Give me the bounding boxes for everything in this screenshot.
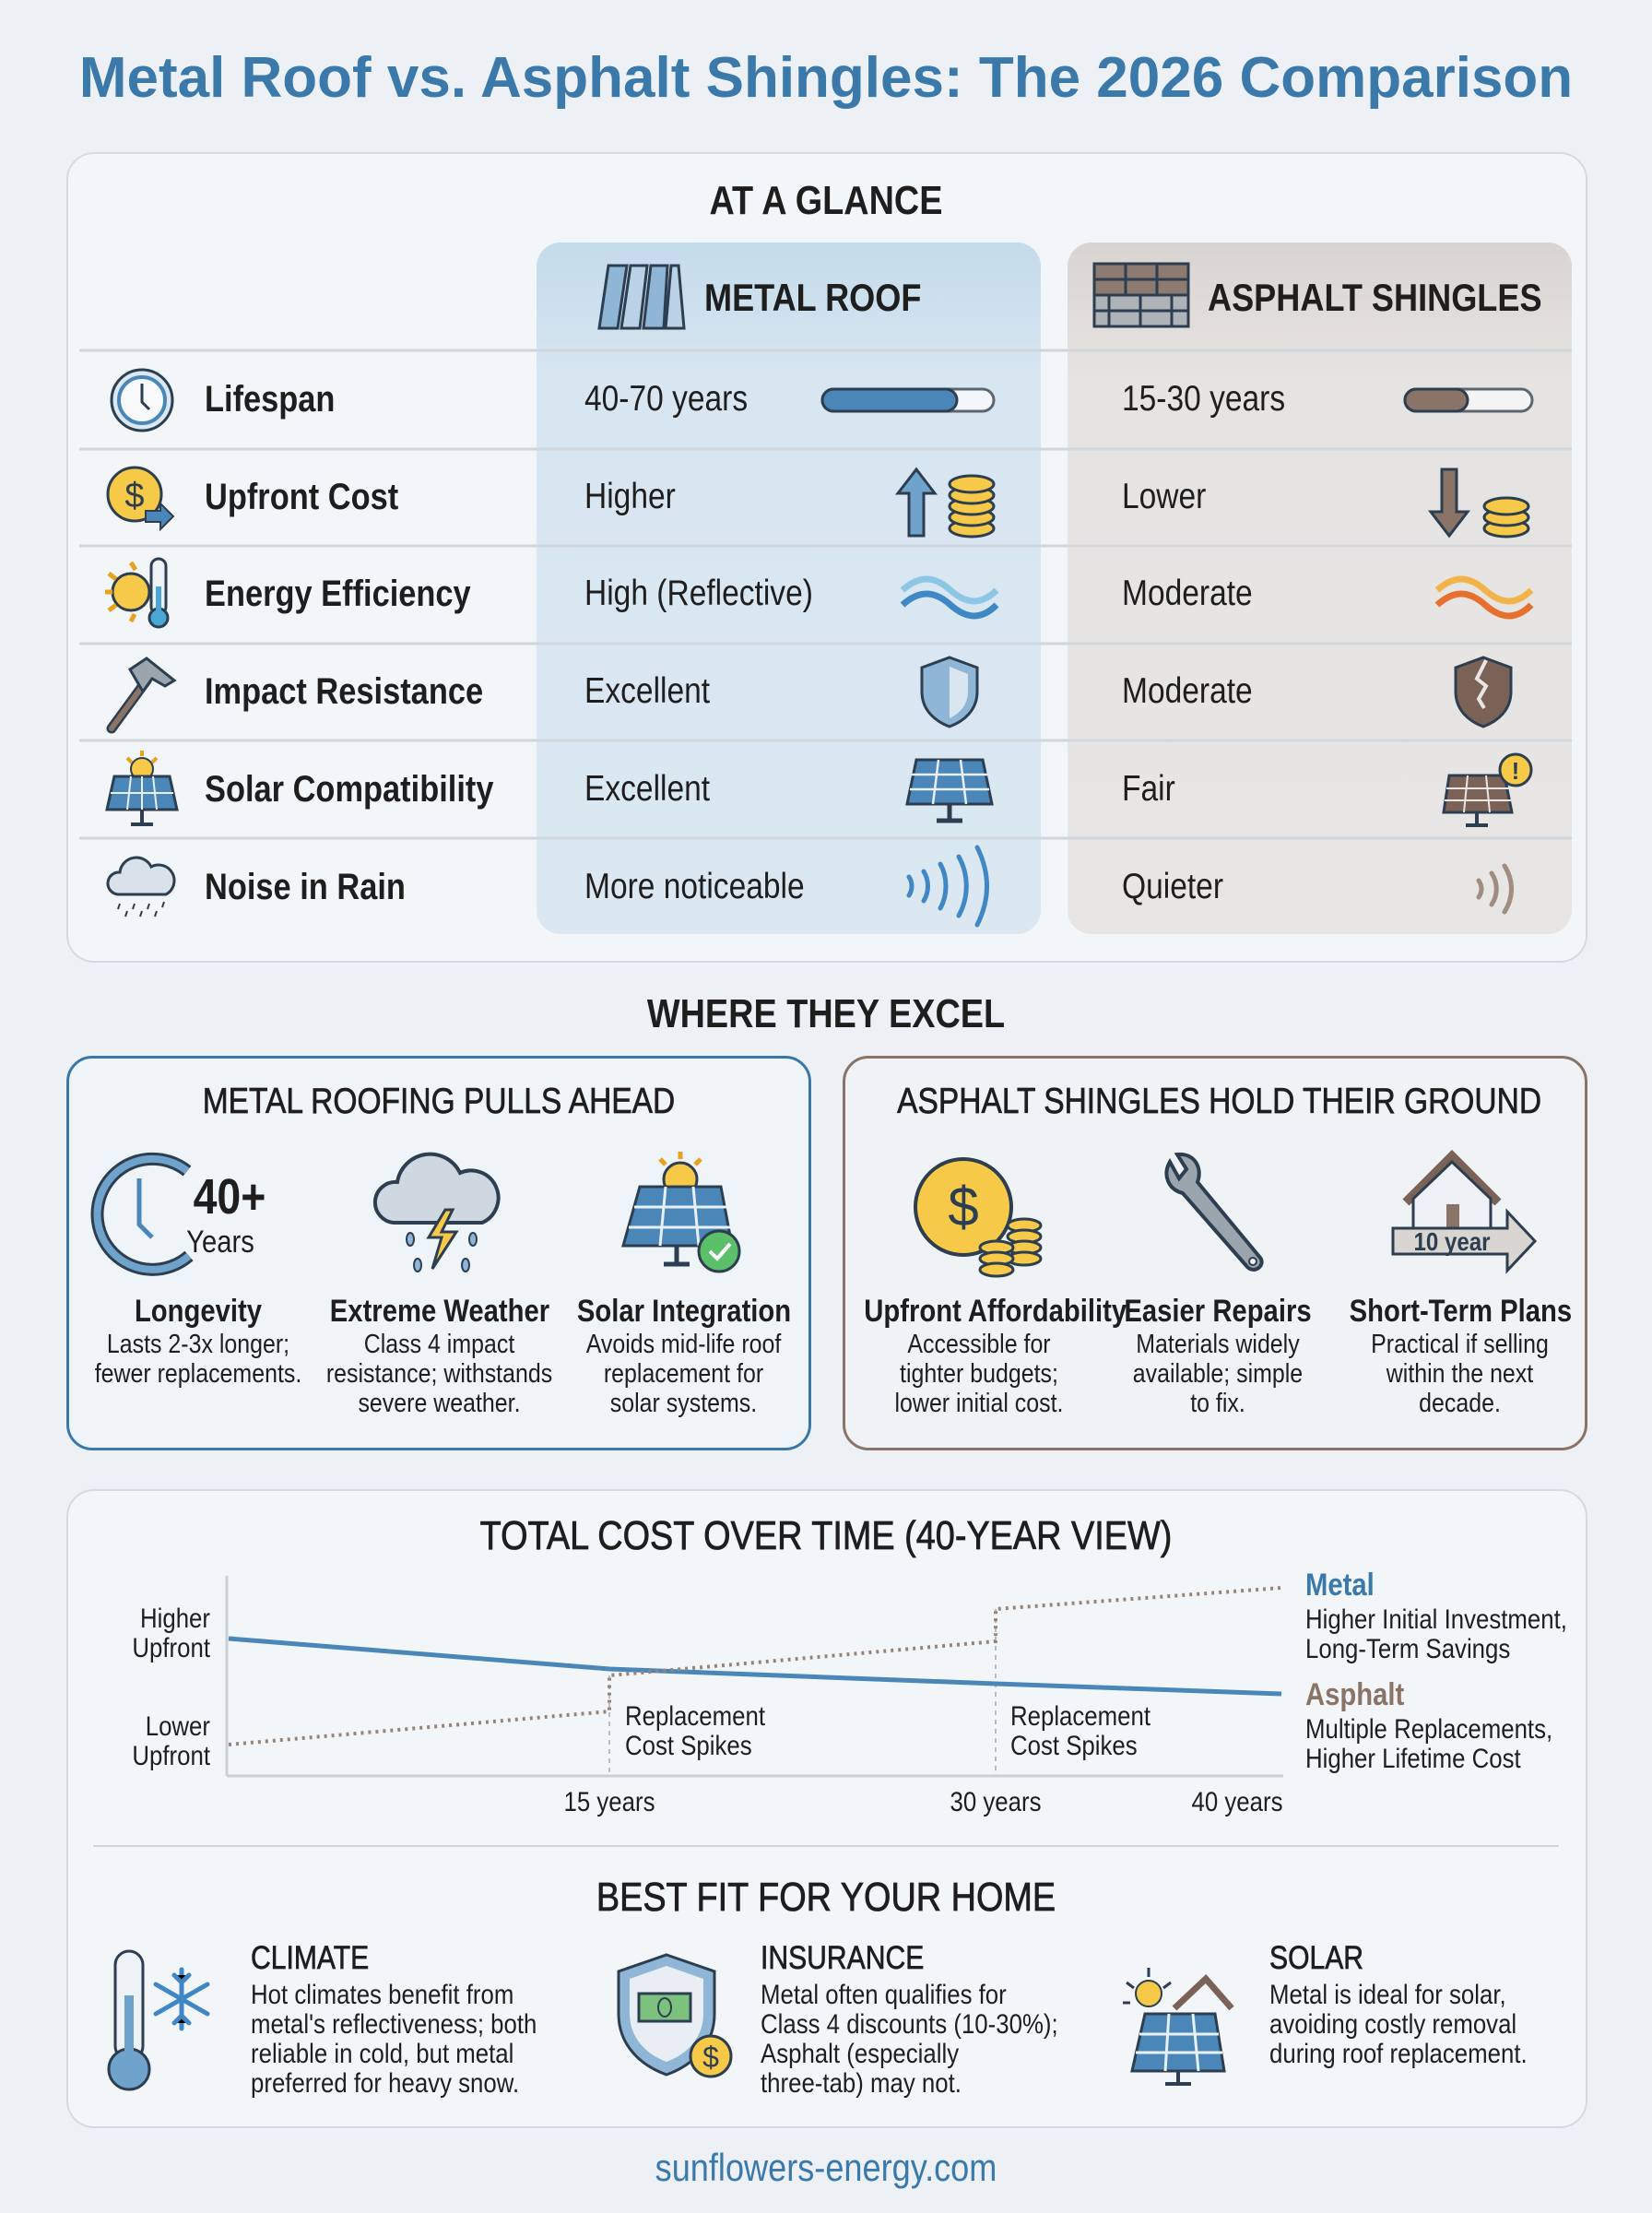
header: asphalt shingles: ASPHALT SHINGLES <box>1208 276 1542 319</box>
icon: shingles <box>1093 262 1189 328</box>
icon: storm cloud <box>372 1153 501 1272</box>
metal column background <box>537 243 1041 934</box>
icon: cracked shield <box>1455 656 1512 728</box>
icon: 40+ clock <box>90 1153 266 1276</box>
item: climate: Hot climates benefit from metal's reflectiveness; both reliable in cold, but metal preferred for heavy snow. <box>251 1980 537 2099</box>
text: Energy Efficiency <box>205 574 471 614</box>
header: metal roof: METAL ROOF <box>704 276 921 319</box>
icon: warm waves <box>1434 575 1534 620</box>
header: metal roof <box>597 264 921 330</box>
text: 40-70 years <box>584 379 748 419</box>
icon: shield with money <box>618 1953 732 2078</box>
heading: best fit: BEST FIT FOR YOUR HOME <box>596 1875 1056 1920</box>
icon: 40+ clock: Years <box>186 1224 254 1260</box>
item: solar integration: Solar Integration <box>577 1294 791 1329</box>
icon: rain cloud <box>108 858 174 917</box>
text: Fair <box>1122 769 1175 809</box>
annotation: replacement spikes <box>625 1701 765 1761</box>
text: Lower <box>146 1711 210 1742</box>
text: Quieter <box>1122 867 1223 906</box>
item: solar: SOLAR <box>1269 1940 1363 1976</box>
text: Lifespan <box>205 379 335 420</box>
icon: hammer <box>112 658 174 728</box>
asphalt column background <box>1068 243 1572 934</box>
panel: metal roofing pulls ahead: Avoids mid-life roof replacement for solar systems. <box>586 1330 781 1418</box>
text: Moderate <box>1122 574 1253 613</box>
panel: total cost and best fit <box>66 1489 1587 2128</box>
item: insurance: Metal often qualifies for <box>761 1980 1007 2010</box>
row: upfront cost <box>107 467 175 531</box>
item: insurance <box>618 1940 1058 2099</box>
icon: shield with money: $ <box>702 2041 719 2074</box>
icon: house with 10 year arrow <box>1392 1150 1537 1274</box>
item: longevity: Longevity <box>135 1294 262 1329</box>
item: climate <box>107 1940 537 2099</box>
text: High (Reflective) <box>584 574 813 613</box>
item: extreme weather: Extreme Weather <box>330 1294 549 1329</box>
panel: asphalt shingles hold their ground: Accessible for tighter budgets; lower initial cost. <box>895 1330 1063 1418</box>
icon: house with 10 year arrow: 10 year <box>1413 1226 1491 1256</box>
icon: coin stack: $ <box>948 1176 979 1237</box>
panel: metal roofing pulls ahead: Lasts 2-3x longer; fewer replacements. <box>95 1330 301 1389</box>
icon: dollar coin: $ <box>124 477 145 515</box>
item: insurance: Class 4 discounts (10-30%); <box>761 2009 1058 2040</box>
panel: asphalt shingles hold their ground: Materials widely available; simple to fix. <box>1133 1330 1303 1418</box>
text: 30 years <box>950 1787 1041 1817</box>
item: easier repairs: Easier Repairs <box>1124 1294 1312 1329</box>
icon: coin stack <box>914 1157 1042 1278</box>
heading: ASPHALT SHINGLES HOLD THEIR GROUND <box>897 1082 1541 1121</box>
icon: shield <box>920 656 979 728</box>
heading: total cost over time: TOTAL COST OVER TIME (40-YEAR VIEW) <box>480 1513 1172 1558</box>
glance heading: AT A GLANCE <box>710 178 942 223</box>
icon: quiet sound waves <box>1477 863 1514 915</box>
text: Solar Compatibility <box>205 769 493 810</box>
bar: metal lifespan <box>820 387 996 413</box>
legend: Higher Lifetime Cost <box>1305 1744 1521 1774</box>
item: climate: CLIMATE <box>251 1940 369 1976</box>
heading: where they excel: WHERE THEY EXCEL <box>647 991 1005 1036</box>
icon: sun house solar panel <box>1123 1968 1234 2086</box>
panel: at a glance <box>66 152 1587 963</box>
text: Upfront Cost <box>205 477 398 517</box>
icon: clock <box>111 369 173 432</box>
icon: sun thermometer <box>105 559 168 627</box>
text: Lower <box>1122 477 1206 516</box>
axis labels: Higher <box>140 1604 210 1634</box>
header: asphalt shingles <box>1093 262 1542 328</box>
item: insurance: three-tab) may not. <box>761 2068 962 2099</box>
icon: dollar coin <box>107 467 175 531</box>
text: Replacement <box>1010 1701 1150 1732</box>
item: solar <box>1123 1940 1528 2086</box>
text: Higher <box>584 477 676 516</box>
text: Impact Resistance <box>205 671 483 712</box>
legend: Multiple Replacements, <box>1305 1714 1552 1745</box>
text: More noticeable <box>584 867 805 906</box>
icon: up arrow coins <box>895 467 996 538</box>
legend: Metal <box>1305 1568 1375 1603</box>
asphalt dotted line <box>229 1588 1281 1745</box>
row: noise in rain <box>106 856 176 917</box>
legend: Long-Term Savings <box>1305 1634 1510 1664</box>
axis labels <box>132 1604 210 1663</box>
text: Noise in Rain <box>205 867 406 907</box>
text: Upfront <box>132 1741 210 1771</box>
legend: Asphalt <box>1305 1677 1404 1712</box>
annotation: replacement spikes: Cost Spikes <box>625 1731 752 1761</box>
legend: Higher Initial Investment, <box>1305 1604 1567 1635</box>
row: solar compatibility <box>105 751 179 826</box>
text: 15-30 years <box>1122 379 1285 419</box>
icon: solar panel warning <box>1442 752 1532 827</box>
legend <box>1305 1568 1567 1774</box>
heading: METAL ROOFING PULLS AHEAD <box>203 1082 675 1121</box>
row: impact resistance <box>107 657 177 734</box>
icon: 40+ clock: 40+ <box>194 1168 266 1225</box>
panel: asphalt shingles hold their ground <box>843 1056 1587 1450</box>
metal line <box>229 1639 1281 1694</box>
text: Excellent <box>584 671 710 711</box>
x axis labels: 15 years <box>564 1787 655 1817</box>
icon: solar panel warning: ! <box>1512 757 1519 785</box>
icon: down arrow coins <box>1428 468 1530 538</box>
item: short-term plans: Short-Term Plans <box>1350 1294 1572 1329</box>
icon: solar panel check <box>621 1152 741 1272</box>
item: solar: Metal is ideal for solar, avoiding costly removal during roof replacement. <box>1269 1980 1528 2069</box>
icon: cool waves <box>900 575 999 620</box>
text: 40 years <box>1192 1787 1282 1817</box>
row: energy efficiency <box>105 557 170 629</box>
item: insurance: INSURANCE <box>761 1940 924 1976</box>
panel: metal roofing pulls ahead <box>66 1056 811 1450</box>
icon: wrench <box>1164 1153 1264 1272</box>
icon: solar panel with sun <box>107 751 177 824</box>
icon: metal panels <box>597 264 686 330</box>
bar: asphalt lifespan <box>1403 387 1534 413</box>
footer: website: sunflowers-energy.com <box>655 2146 997 2189</box>
item: upfront affordability: Upfront Affordability <box>864 1294 1127 1329</box>
icon: loud sound waves <box>907 845 989 928</box>
axis labels: Upfront <box>132 1633 210 1663</box>
text: Cost Spikes <box>1010 1731 1138 1761</box>
panel: metal roofing pulls ahead: Class 4 impact resistance; withstands severe weather. <box>326 1330 552 1418</box>
title: Metal Roof vs. Asphalt Shingles: The 2026 Comparison <box>79 46 1573 110</box>
item: insurance: Asphalt (especially <box>761 2039 959 2069</box>
panel: asphalt shingles hold their ground: Practical if selling within the next decade. <box>1371 1330 1549 1418</box>
annotation: replacement spikes: Replacement <box>625 1701 765 1732</box>
icon: thermometer snowflake <box>107 1949 210 2091</box>
text: Excellent <box>584 769 710 809</box>
icon: solar panel <box>905 758 994 822</box>
row: lifespan <box>111 369 173 432</box>
text: Moderate <box>1122 671 1253 711</box>
